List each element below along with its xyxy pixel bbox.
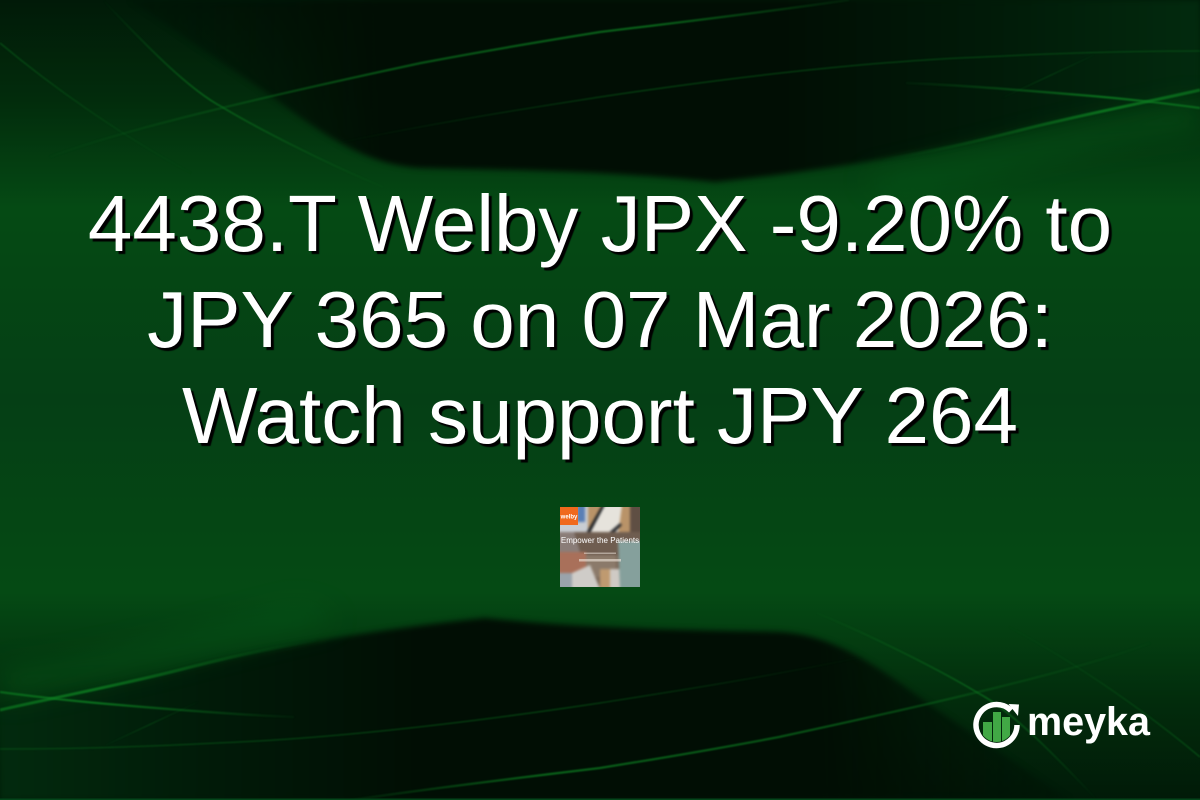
icon: circular arrow with bars xyxy=(976,704,1019,745)
title: 4438.T Welby JPX -9.20% to xyxy=(88,179,1112,268)
thumbnail: Welby Empower the Patients: welby xyxy=(560,514,578,520)
logo: meyka xyxy=(973,700,1151,748)
wordmark: meyka xyxy=(1027,700,1151,744)
thumbnail: Welby Empower the Patients: Empower the Patients xyxy=(561,536,639,545)
title: Watch support JPY 264 xyxy=(182,371,1018,460)
title: JPY 365 on 07 Mar 2026: xyxy=(147,275,1053,364)
title xyxy=(88,179,1112,463)
thumbnail: Welby Empower the Patients xyxy=(560,507,640,587)
